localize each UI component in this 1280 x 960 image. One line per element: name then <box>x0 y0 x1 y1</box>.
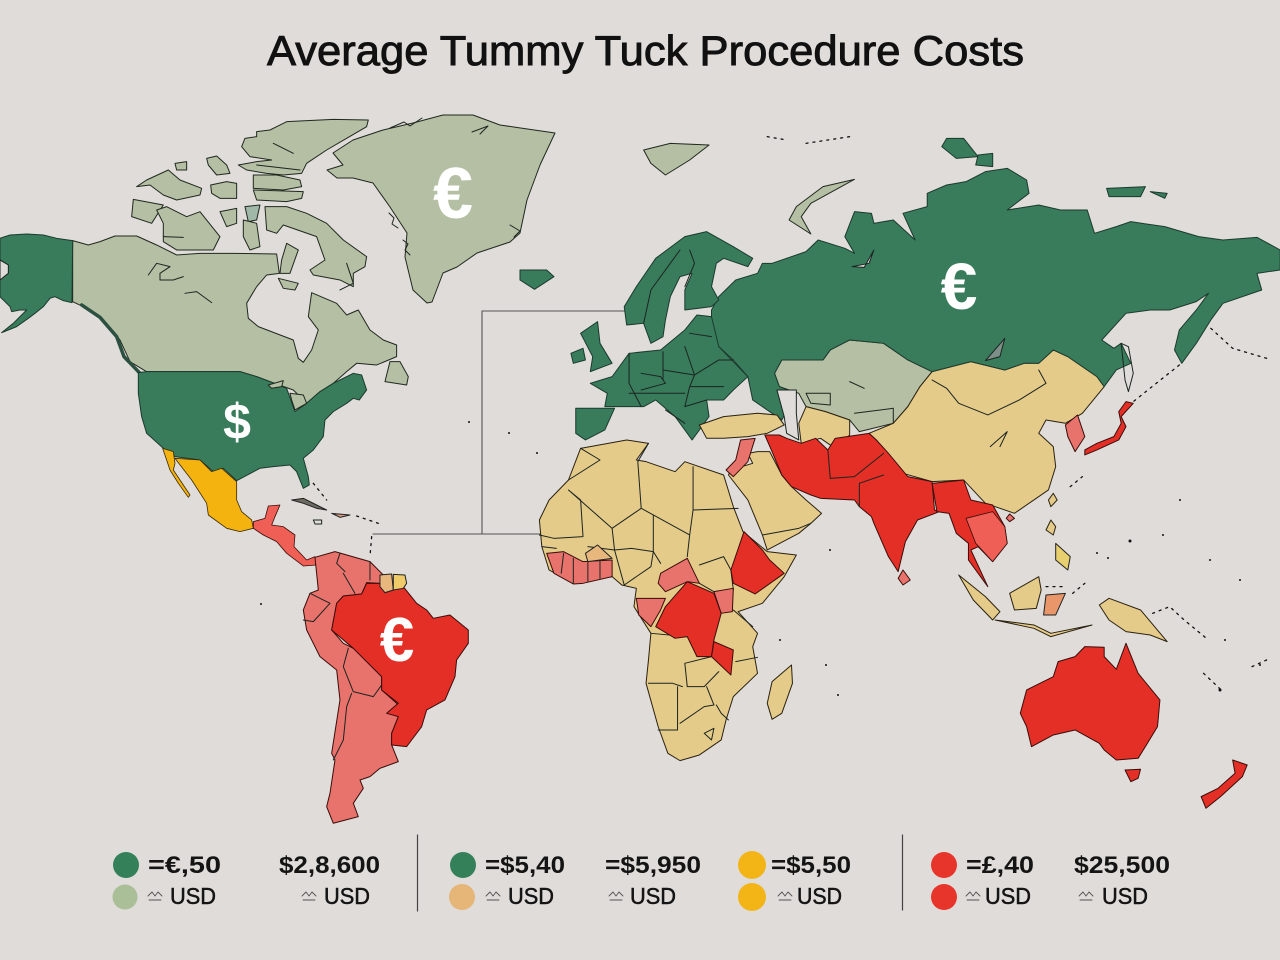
legend divider left <box>416 835 418 911</box>
map: latin america <box>163 448 468 823</box>
scandinavia borders <box>644 250 695 323</box>
legend group 1: USD <box>324 883 370 909</box>
legend <box>112 835 1170 911</box>
legend group 2: USD <box>508 883 554 909</box>
great lakes <box>268 381 307 410</box>
hainan <box>1006 514 1014 522</box>
burkina region <box>585 545 612 562</box>
europe borders <box>629 333 733 423</box>
legend group 1: =€,50 <box>148 852 221 879</box>
gabon and congo <box>636 598 665 627</box>
tasmania <box>1125 769 1141 782</box>
japan <box>1085 402 1133 455</box>
map: africa, south asia and oceania <box>539 433 1267 808</box>
euro symbol: russia: € <box>941 249 977 323</box>
new guinea <box>1099 598 1167 642</box>
dr congo <box>656 582 721 657</box>
united states <box>138 372 367 488</box>
brazil <box>332 583 468 747</box>
alaska panhandle <box>82 305 140 373</box>
mexico <box>175 458 253 532</box>
korea <box>1065 415 1085 452</box>
arabia <box>728 452 822 550</box>
kuril chain <box>1133 328 1267 402</box>
africa <box>539 440 796 761</box>
canada <box>73 236 397 403</box>
french guiana <box>393 574 407 590</box>
scandinavia <box>624 232 753 343</box>
legend group 1 <box>112 852 380 910</box>
ireland <box>571 348 585 363</box>
levant <box>726 438 755 477</box>
pacific islands <box>1046 477 1267 692</box>
caribbean islands <box>292 483 378 557</box>
baja california <box>163 448 190 497</box>
arctic islands <box>644 137 1167 234</box>
madagascar <box>767 665 792 719</box>
tanzania region <box>711 642 733 675</box>
map: eurasia <box>520 137 1280 513</box>
europe <box>590 315 748 440</box>
arabia border <box>762 523 811 535</box>
arctic islands <box>132 119 408 385</box>
java <box>995 620 1092 637</box>
sri lanka <box>898 570 910 585</box>
central african republic <box>658 558 699 592</box>
alaska <box>0 234 73 333</box>
iberia <box>576 408 615 440</box>
philippines south <box>1056 543 1070 570</box>
china and mongolia <box>869 350 1104 513</box>
caspian sea <box>777 390 799 440</box>
ob gulf <box>852 250 874 267</box>
south asia borders <box>828 450 884 507</box>
guianas <box>380 574 393 593</box>
new zealand <box>1201 760 1247 808</box>
borneo <box>1010 577 1041 610</box>
kazakhstan and central asia <box>775 340 932 432</box>
west africa borders <box>561 553 600 583</box>
russia <box>707 168 1280 420</box>
sakhalin and kurils <box>1121 343 1133 392</box>
legend group 1: USD <box>170 883 216 909</box>
mongolia border <box>932 370 1046 447</box>
iran to india <box>765 433 939 572</box>
australia <box>1020 643 1160 760</box>
sulawesi <box>1044 593 1065 615</box>
africa borders <box>539 443 758 740</box>
iceland <box>520 270 554 289</box>
indochina <box>966 512 1007 562</box>
map: north america <box>0 119 408 488</box>
legend group 3: USD <box>797 883 842 909</box>
legend group 2 <box>449 852 701 910</box>
britain <box>581 322 612 372</box>
taiwan <box>1048 493 1057 507</box>
kazakhstan borders <box>806 382 893 423</box>
legend group 3: =$5,50 <box>771 852 851 879</box>
euro symbol: greenland: € <box>433 154 473 234</box>
euro symbol: brazil: € <box>380 606 414 675</box>
uganda <box>714 588 733 613</box>
legend group 2: USD <box>630 883 676 909</box>
legend group 4: $25,500 <box>1074 852 1170 879</box>
dollar symbol: usa: $ <box>223 394 251 450</box>
title: Average Tummy Tuck Procedure Costs <box>267 27 1024 74</box>
sumatra <box>959 575 1000 620</box>
map: greenland <box>327 115 555 303</box>
legend group 4: =£,40 <box>966 852 1034 879</box>
lake baikal <box>985 338 1005 361</box>
greenland fjords <box>389 118 520 255</box>
central asia south <box>799 407 850 448</box>
connector lines <box>373 311 625 534</box>
central america <box>253 505 317 566</box>
southeast asia <box>932 480 1007 587</box>
legend group 4: USD <box>985 883 1031 909</box>
legend group 4 <box>931 852 1170 910</box>
legend group 2: =$5,950 <box>605 852 701 879</box>
legend divider right <box>902 835 904 910</box>
ethiopia <box>731 532 784 594</box>
legend group 1: $2,8,600 <box>279 852 380 879</box>
south america borders <box>303 553 382 760</box>
west africa coast <box>547 552 612 584</box>
small island specks <box>260 421 1261 696</box>
turkey <box>699 413 784 438</box>
legend group 3 <box>738 851 851 911</box>
legend group 2: =$5,40 <box>485 852 565 879</box>
legend group 4: USD <box>1102 883 1148 909</box>
alaska inlet <box>0 260 8 280</box>
south america west <box>303 552 398 823</box>
philippines <box>1046 520 1056 535</box>
